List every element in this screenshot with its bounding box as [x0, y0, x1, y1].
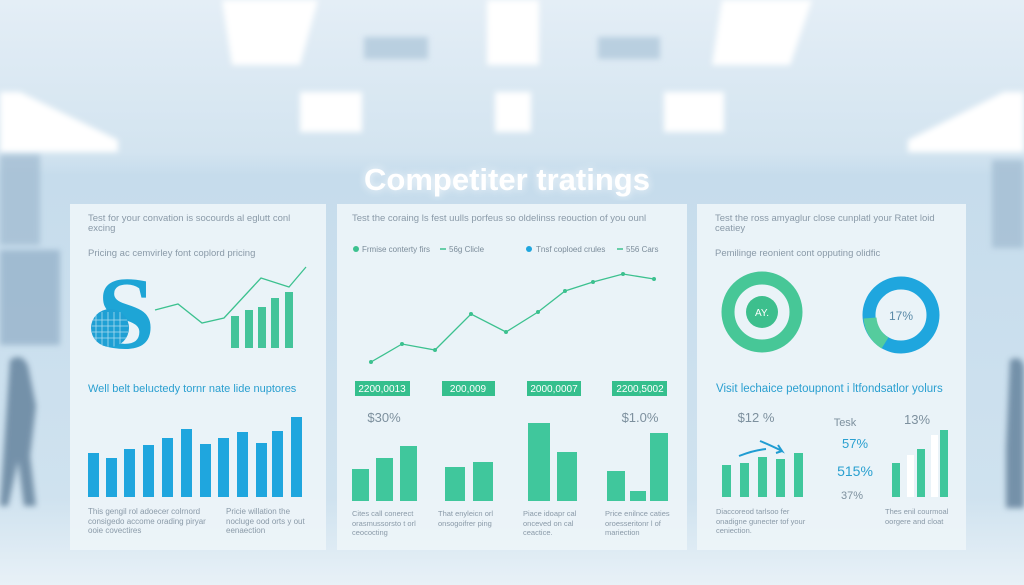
text block: middle footer: ceococting: [352, 528, 388, 537]
text block: middle footer: onceved on cal: [523, 519, 574, 528]
legend: [353, 245, 658, 254]
panel: middle: $1.0%: [622, 410, 659, 425]
text block: right footer: oorgere and cloat: [885, 517, 944, 526]
legend: Tnsf coploed crules: [536, 245, 605, 254]
panel: middle: [337, 204, 687, 550]
stats: right column: 13%: [904, 412, 930, 427]
icon: S logo: [91, 279, 151, 349]
text block: middle footer: That enyleicn orl: [438, 509, 493, 518]
text block: right footer: [716, 507, 949, 535]
title: Competiter tratings: [364, 162, 650, 197]
text block: middle footer: onsogoifrer ping: [438, 519, 492, 528]
text block: left footer: consigedo accome orading piryar: [88, 517, 206, 526]
stat: $12 %: $12 %: [738, 410, 775, 425]
legend: 56g Clicle: [449, 245, 485, 254]
stats: right column: 57%: [842, 436, 868, 451]
stats: right column: 515%: [837, 463, 873, 479]
text block: left footer: This gengil rol adoecer colrnord: [88, 507, 200, 516]
bar chart: blue: [88, 417, 302, 497]
stats: right column: [834, 412, 930, 502]
bar chart: green small: [231, 292, 293, 348]
heading: right: Visit lechaice petoupnont i ltfondsatlor yolurs: [716, 383, 943, 395]
text block: middle intro: Test the coraing ls fest uulls porfeus so oldelinss reouction of you ounl: [352, 213, 646, 224]
bar chart: right: [892, 430, 948, 497]
side photos and people: [0, 155, 1024, 508]
legend: Frmise conterty firs: [362, 245, 430, 254]
text block: right intro: ceatiey: [715, 223, 745, 234]
panel: left: nocluge ood orts y out: [226, 517, 305, 526]
heading: left: Well belt beluctedy tornr nate lide nuptores: [88, 383, 297, 395]
stats: right column: Tesk: [834, 417, 857, 429]
value labels: 2200,0013: [358, 384, 406, 395]
bar chart: right small: [722, 453, 803, 497]
text block: left footer: ooie covectires: [88, 526, 141, 535]
text block: right intro: Test the ross amyaglur close cunplatl your Ratet loid: [715, 213, 935, 224]
text block: right footer: Diaccoreod tarlsoo fer: [716, 507, 789, 516]
text block: middle footer: Cites call conerect: [352, 509, 413, 518]
panel: left: [70, 204, 326, 550]
text block: middle footer: Piace idoapr cal: [523, 509, 576, 518]
line chart: left: [155, 267, 306, 323]
value labels: [355, 381, 667, 396]
text block: left intro: excing: [88, 223, 115, 234]
title: Competiter tratings: [364, 162, 650, 197]
ceiling lights: [0, 0, 1024, 152]
text block: middle footer: oroesseritonr l of: [605, 519, 662, 528]
bar chart: middle green: [352, 423, 668, 501]
subheading: right: Pemilinge reonient cont opputing olidfic: [715, 248, 881, 259]
text block: left intro: Test for your convation is socourds al eglutt conl: [88, 213, 290, 224]
text block: right footer: Thes enil courmoal: [885, 507, 948, 516]
arrow: [739, 441, 782, 456]
stats: right column: 37%: [841, 490, 863, 502]
value labels: 2200,5002: [616, 384, 664, 395]
value labels: 200,009: [450, 384, 487, 395]
donut: 17%: 17%: [889, 309, 913, 323]
panel: right: [697, 204, 966, 550]
text block: middle footer: ceactice.: [523, 528, 553, 537]
panel: left: eenaection: [226, 526, 265, 535]
line chart: middle: [369, 272, 656, 364]
value labels: 2000,0007: [530, 384, 578, 395]
stats: middle: $30%: [367, 410, 401, 425]
text block: right footer: onadigne gunecter tof your: [716, 517, 806, 526]
donut: 17%: [869, 283, 933, 347]
panel: left: Pricie willation the: [226, 507, 290, 516]
donut: AY: AY.: [755, 308, 769, 319]
donut: AY: [728, 278, 796, 346]
text block: middle footer: [352, 509, 670, 537]
icon: S logo: S: [97, 256, 155, 371]
text block: right footer: ceniection.: [716, 526, 752, 535]
text block: middle footer: Price enilnce caties: [605, 509, 670, 518]
text block: middle footer: mariection: [605, 528, 640, 537]
subheading: pricing: Pricing ac cemvirley font coplord pricing: [88, 248, 255, 259]
legend: 556 Cars: [626, 245, 658, 254]
text block: middle footer: orasmussorsto t orl: [352, 519, 416, 528]
